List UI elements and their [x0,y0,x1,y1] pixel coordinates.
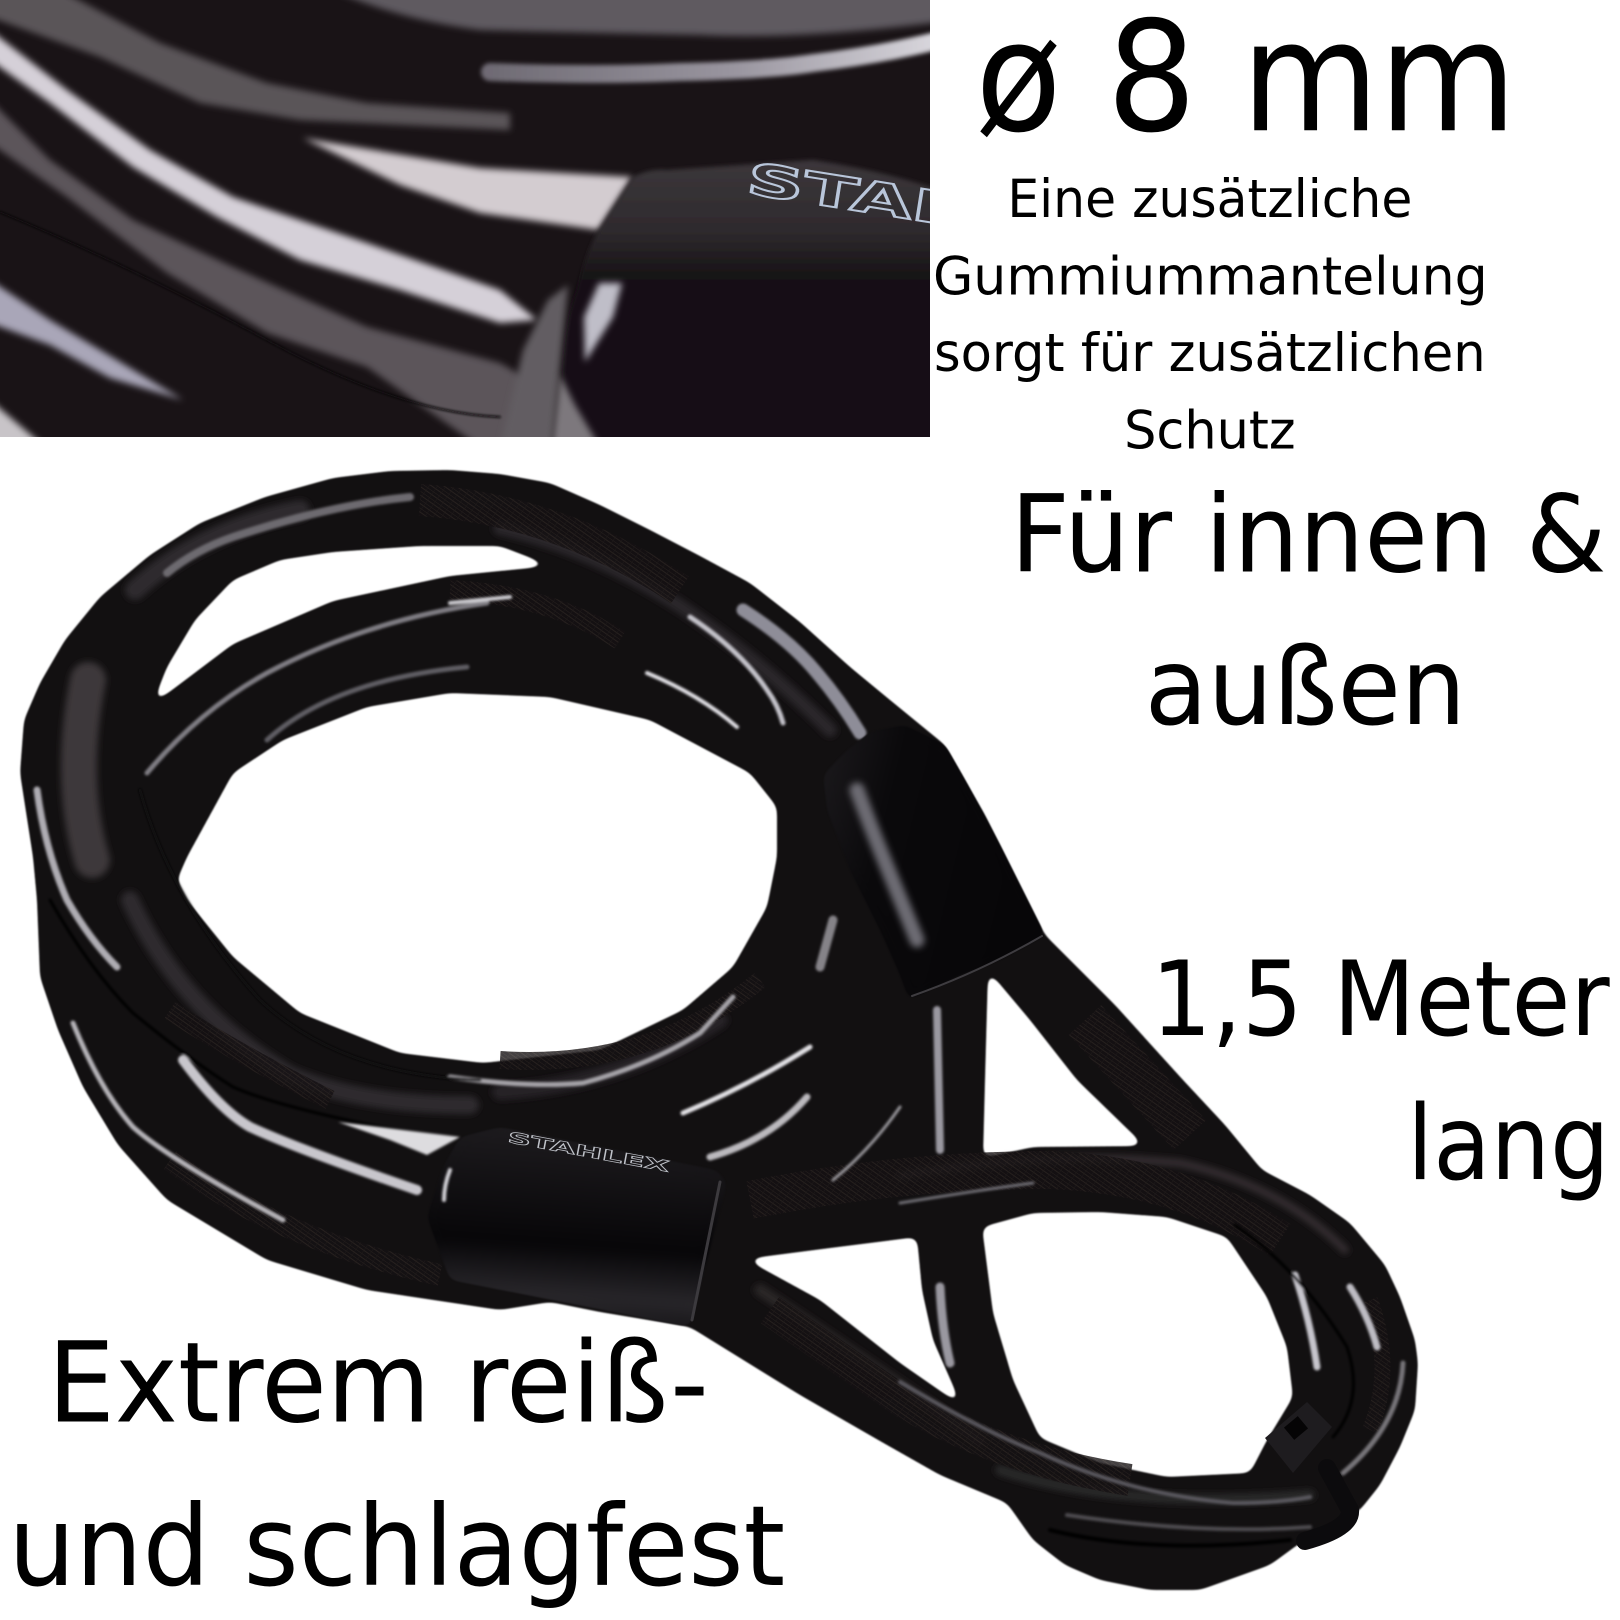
text block: rubber coating: Eine zusätzliche [1007,169,1412,230]
text block: length [1151,940,1610,1204]
cable silhouette [20,470,1418,1590]
text block: tear and impact resistant [8,1319,785,1612]
text block: rubber coating: Gummiummantelung [933,246,1488,307]
zip tie [1265,1402,1350,1541]
text block: rubber coating [933,169,1488,461]
brand lettering: STAHLEX [506,1128,672,1176]
text block: indoor and outdoor: außen [1145,625,1466,750]
light gap above lower sleeve [338,1122,460,1155]
panel: close-up photo of cable and sleeve [0,0,930,437]
cable sleeve: upper [823,725,1045,1000]
main coil opening [177,693,777,1063]
cable sheen: broad matte bands [79,510,1345,1499]
text block: rubber coating: sorgt für zusätzlichen [934,323,1486,384]
text block: tear and impact resistant: und schlagfest [8,1482,785,1612]
text block: indoor and outdoor: Für innen & [1010,472,1607,597]
illustration: coiled steel cable with loops [20,470,1418,1590]
white openings between the coils [152,546,1293,1477]
sleeve brand lettering: STAHLEX [743,153,1146,266]
text block: rubber coating: Schutz [1124,400,1296,461]
cable braid texture [170,500,1382,1480]
cable sleeve: lower with brand [427,1127,727,1327]
text block: indoor and outdoor [1010,472,1607,750]
sleeve in close-up [500,160,940,447]
text block: tear and impact resistant: Extrem reiß- [48,1319,709,1449]
cable highlights [37,497,1403,1546]
